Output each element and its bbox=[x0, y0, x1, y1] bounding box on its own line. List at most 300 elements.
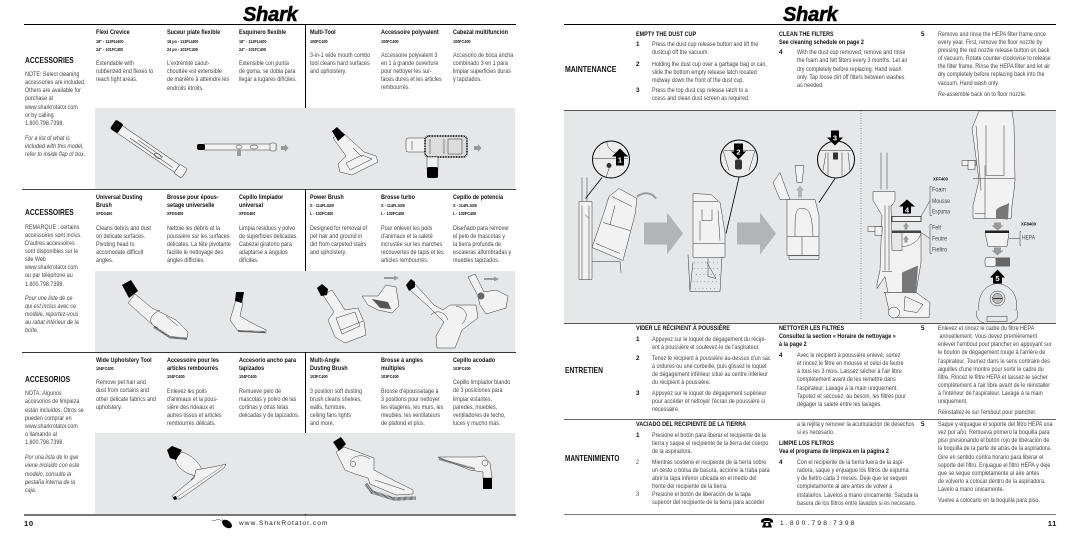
text: multi-tool: and upholstery. bbox=[310, 68, 346, 75]
note: lista de accesorios incluidos bbox=[24, 454, 80, 494]
text: remove and rinse HEPA filter: pressing the red nozzle release button on back bbox=[938, 47, 1049, 54]
text: accesorio ancho para tapizados: 104FC400 bbox=[239, 374, 257, 379]
text: accesorio ancho para tapizados: mascotas y polvo de las bbox=[239, 396, 296, 403]
icon: multi-angle brush large bbox=[333, 437, 416, 499]
text: clean the filters: CLEAN THE FILTERS bbox=[779, 31, 834, 38]
text: accessoire polyvalent: en 1 à grande ouverture bbox=[381, 60, 438, 67]
note: disponibilité des accessoires: accessoires sont inclus. bbox=[25, 232, 82, 239]
text: brosse pour époussetage: Nettoie les débris et la bbox=[167, 225, 220, 232]
text: universal dusting brush: XFDS400 bbox=[96, 211, 112, 216]
text: limpie los filtros: si es necesario. bbox=[797, 429, 834, 436]
text: rincez le cadre du filtre HEPA: le bouton de dégagement rouge à l'arrière de bbox=[938, 349, 1045, 356]
text: cepillo acodado: limpiar estantes, bbox=[453, 396, 492, 403]
text: esquinero flexible bbox=[239, 29, 297, 83]
text: multi-angle dusting brush bbox=[310, 357, 362, 427]
text: empty the dust cup: Holding the dust cup over a garbage bag or can, bbox=[652, 61, 767, 68]
text: rincez le cadre du filtre HEPA: uniquement. bbox=[938, 398, 968, 405]
text: accessoire polyvalent: Accessoire polyvalent bbox=[381, 29, 439, 36]
text: nettoyer les filtres: Consultez la section « Horaire de nettoyage » bbox=[779, 333, 896, 340]
text: saque el soporte del filtro HEPA: vez por año. Remueva primero la boquilla para bbox=[938, 429, 1050, 436]
text: universal dusting brush: Cleans debris and dust bbox=[96, 225, 151, 232]
note: liste des accessoires inclus: Pour une liste de ce bbox=[25, 294, 72, 302]
text: brosse à angles multiples: de plafond et plus. bbox=[381, 420, 425, 427]
text: cepillo acodado: Cepillo limpiador blando bbox=[453, 379, 510, 386]
text: cepillo limpiador universal: de superficies delicadas. bbox=[239, 233, 298, 240]
text: clean the filters bbox=[779, 31, 908, 89]
text: saque el soporte del filtro HEPA: de volverlo a colocar dentro de la aspiradora. bbox=[938, 478, 1045, 485]
note: accessories availability: 1.800.798.7398. bbox=[25, 120, 64, 127]
text: rincez le cadre du filtre HEPA bbox=[921, 325, 1049, 417]
step 3: access dust screen: 3 bbox=[833, 133, 837, 142]
text: suceur plate flexible: de manière à atteindre les bbox=[167, 76, 229, 83]
text: esquinero flexible: llegar a lugares difíciles. bbox=[239, 76, 297, 83]
heading: entretien: ENTRETIEN bbox=[565, 365, 603, 375]
text: nettoyer les filtres: et rincez le filtre en mousse et celui de feutre bbox=[797, 360, 904, 367]
illustration panel: upholstery and multi-angle tools bbox=[95, 433, 515, 514]
text: cepillo limpiador universal: universal bbox=[239, 202, 263, 209]
text: wide upholstery tool: 104FC400 bbox=[96, 366, 114, 371]
icon: telephone bbox=[761, 518, 773, 528]
illustration: foam and felt filters with vacuum: Fieltro bbox=[932, 247, 948, 253]
text: cepillo limpiador universal: adaptarse a ángulos bbox=[239, 249, 288, 256]
text: multi-angle dusting brush: brush cleans shelves, bbox=[310, 396, 362, 403]
text: multi-angle dusting brush: walls, furniture, bbox=[310, 404, 346, 411]
text: remove and rinse HEPA filter bbox=[921, 31, 1051, 98]
footer: page number 10: 10 bbox=[24, 519, 34, 528]
text: vaciado del recipiente: superior del recipiente de la tierra para acceder bbox=[652, 499, 765, 506]
text: accessoire polyvalent: pour nettoyer les sur- bbox=[381, 68, 432, 75]
text: brosse pour époussetage: XFDS400 bbox=[167, 211, 183, 216]
text: clean the filters: as needed. bbox=[797, 82, 824, 89]
note: accessories availability: or by calling bbox=[25, 112, 54, 119]
note: disponibilidad de accesorios: NOTA: Algunos bbox=[25, 390, 62, 397]
text: cepillo acodado: paredes, muebles, bbox=[453, 404, 497, 411]
text: limpie los filtros: completamente al aire antes de volver a bbox=[797, 483, 892, 490]
text: rincez le cadre du filtre HEPA: aiguilles d'une montre pour sortir le cadre du bbox=[938, 366, 1044, 373]
text: accessoire polyvalent: 100FC400 bbox=[381, 39, 399, 44]
text: cepillo acodado: de 3 posiciones para bbox=[453, 387, 503, 394]
illustration: HEPA filter with vacuum and nozzle: XF8400 bbox=[1021, 221, 1036, 226]
text: empty the dust cup: 1 bbox=[636, 41, 640, 48]
text: power brush: L - 102FC400 bbox=[310, 211, 333, 216]
note: accessories availability: purchase at bbox=[25, 95, 53, 102]
text: remove and rinse HEPA filter: vacuum. Hand wash only. bbox=[938, 80, 999, 87]
text: saque el soporte del filtro HEPA: soporte del filtro. Enjuague el filtro HEPA y deje bbox=[938, 462, 1050, 469]
text: saque el soporte del filtro HEPA: Gire en sentido contra horario para liberar el bbox=[938, 454, 1043, 461]
text: multi-angle dusting brush: Dusting Brush bbox=[310, 365, 348, 372]
text: rincez le cadre du filtre HEPA: Enlevez et rincez le cadre du filtre HEPA bbox=[938, 325, 1034, 332]
text: empty the dust cup: Press the top dust cup release latch to a bbox=[652, 87, 748, 94]
text: brosse à angles multiples: multiples bbox=[381, 365, 405, 372]
text: vider le récipient à poussière bbox=[636, 324, 771, 413]
heading: maintenance: MAINTENANCE bbox=[565, 64, 616, 74]
note: accessories availability: www.sharkrotator.com bbox=[25, 104, 78, 111]
note: lista de accesorios incluidos: modelo, consulte la bbox=[25, 470, 71, 478]
text: brosse pour époussetage: facilite le nettoyage des bbox=[167, 249, 223, 256]
step 2: empty dust cup: 2 bbox=[736, 147, 741, 156]
illustration: HEPA filter with vacuum and nozzle: HEPA bbox=[1022, 235, 1035, 241]
note: disponibilité des accessoires: D'autres accessoires bbox=[25, 240, 75, 247]
illustration: HEPA filter with vacuum and nozzle bbox=[962, 110, 1036, 322]
text: multi-angle dusting brush: 103FC400 bbox=[310, 374, 328, 379]
note: accessories availability: accessories are included. bbox=[25, 79, 86, 86]
text: multi-tool: 100FC400 bbox=[310, 39, 328, 44]
text: accesorio ancho para tapizados bbox=[239, 357, 299, 419]
text: empty the dust cup: Press the dust cup release button and lift the bbox=[652, 41, 758, 48]
text: remove and rinse HEPA filter: the filter frame. Rinse the HEPA filter and let air bbox=[938, 63, 1050, 70]
text: cepillo limpiador universal: XFDS400 bbox=[239, 211, 255, 216]
note: disponibilité des accessoires: sont disponibles sur le bbox=[25, 248, 78, 255]
text: wide upholstery tool: Remove pet hair and bbox=[96, 379, 146, 386]
text: esquinero flexible: 24" - 101FC400 bbox=[239, 47, 266, 52]
text: vider le récipient à poussière: pour accéder et nettoyer l'écran de poussière si bbox=[652, 398, 765, 405]
text: rincez le cadre du filtre HEPA: Réinstallez-le sur l'embout pour plancher. bbox=[938, 409, 1036, 416]
text: vider le récipient à poussière: VIDER LE RÉCIPIENT À POUSSIÈRE bbox=[636, 325, 730, 332]
text: nettoyer les filtres: à la page 2 bbox=[779, 341, 807, 348]
text: cepillo de potencia: muebles tapizados. bbox=[453, 257, 499, 264]
text: brosse pour époussetage: setage universelle bbox=[167, 202, 214, 209]
illustration panel: crevice and multi tools bbox=[95, 108, 515, 189]
text: vaciado del recipiente: 3 bbox=[636, 491, 639, 498]
text: brosse turbo: articles rembourrés. bbox=[381, 257, 428, 264]
illustration panel: maintenance steps bbox=[564, 111, 1056, 323]
note: lista de accesorios incluidos: Por una lista de lo que bbox=[25, 454, 78, 461]
text: flexi crevice: rubberized end flexes to bbox=[96, 68, 153, 75]
note: disponibilidad de accesorios: 1.800.798.7398. bbox=[25, 439, 64, 446]
text: remove and rinse HEPA filter: of vacuum. Rotate counter-clockwise to release bbox=[938, 55, 1051, 62]
text: clean the filters: With the dust cup removed, remove and rinse bbox=[797, 49, 905, 56]
text: vaciado del recipiente: tierra y saque el recipiente de la tierra del cuerpo bbox=[652, 440, 768, 447]
text: accessoire polyvalent: faces dures et les articles bbox=[381, 76, 442, 83]
text: empty the dust cup: 2 bbox=[636, 61, 640, 68]
text: cepillo limpiador universal bbox=[239, 194, 298, 264]
text: vaciado del recipiente bbox=[636, 421, 776, 511]
text: vaciado del recipiente: Presione el botón de liberación de la tapa bbox=[652, 491, 751, 498]
text: flexi crevice: Extendable with bbox=[96, 60, 134, 67]
text: power brush: Designed for removal of bbox=[310, 225, 367, 232]
text: cabezal multifunción: limpiar superficies duras bbox=[453, 68, 511, 75]
text: vider le récipient à poussière: du récipient à poussière. bbox=[652, 379, 710, 386]
text: power brush: pet hair and ground in bbox=[310, 233, 362, 240]
text: vaciado del recipiente: 2 bbox=[636, 459, 639, 466]
text: saque el soporte del filtro HEPA: Lávelo a mano únicamente. bbox=[938, 486, 1004, 493]
text: brosse turbo: d'animaux et la saleté bbox=[381, 233, 433, 240]
text: saque el soporte del filtro HEPA: Vuelve a colocarlo en la boquilla para piso. bbox=[938, 497, 1040, 504]
text: clean the filters: only. Tap loose dirt off filters between washes bbox=[797, 74, 904, 81]
text: cabezal multifunción: combinado 3 en 1 para bbox=[453, 60, 508, 67]
text: vider le récipient à poussière: de dégagement inférieur situé au centre inférieur bbox=[652, 371, 768, 378]
panel: maintenance English bbox=[565, 31, 1051, 102]
icon: multi-angle brush small bbox=[438, 456, 492, 489]
text: cepillo limpiador universal: difíciles. bbox=[239, 257, 258, 264]
panel: accessories Spanish bbox=[24, 357, 515, 514]
text: flexi crevice: 18" - 113FLI400 bbox=[96, 39, 123, 44]
text: accessoire rembourrés: autres tissus et articles bbox=[167, 412, 222, 419]
text: multi-tool bbox=[310, 29, 370, 75]
text: multi-angle dusting brush: Multi-Angle bbox=[310, 357, 340, 364]
text: rincez le cadre du filtre HEPA: filtre. Rincez le filtre HEPA et laissez-le sécher bbox=[938, 374, 1048, 381]
text: rincez le cadre du filtre HEPA: annuellement. Vous devez premièrement bbox=[939, 333, 1037, 340]
illustration: foam and felt filters with vacuum: Mousse bbox=[932, 198, 951, 204]
text: cepillo de potencia: Diseñado para remover bbox=[453, 225, 509, 232]
text: power brush: dirt from carpeted stairs bbox=[310, 241, 366, 248]
note: liste des accessoires inclus bbox=[25, 294, 79, 334]
text: accessoire rembourrés: d'animaux et la pous- bbox=[167, 396, 218, 403]
text: flexi crevice: Flexi Crevice bbox=[96, 29, 130, 36]
heading: accesorios: ACCESORIOS bbox=[25, 374, 70, 384]
note: disponibilité des accessoires bbox=[25, 224, 82, 288]
illustration: foam and felt filters with vacuum: Felt bbox=[932, 225, 941, 231]
text: brosse turbo: S - 114FLI400 bbox=[381, 203, 405, 208]
note: disponibilité des accessoires: ou par téléphone au bbox=[25, 272, 73, 279]
footer: page number 11: 11 bbox=[1048, 519, 1057, 528]
text: cepillo limpiador universal: Cabezal giratorio para bbox=[239, 241, 292, 248]
text: limpie los filtros: a la rejilla y remover la acumulación de desechos bbox=[797, 421, 914, 428]
text: universal dusting brush: Pivoting head to bbox=[96, 241, 135, 248]
note: disponibilité des accessoires: www.sharkrotator.com bbox=[25, 264, 78, 271]
step 1: remove dust cup: 1 bbox=[618, 155, 622, 164]
text: cepillo de potencia: el pelo de mascotas y bbox=[453, 233, 505, 240]
icon: dusting brush large bbox=[122, 280, 188, 339]
text: power brush: Power Brush bbox=[310, 194, 344, 201]
icon: multi-tool side view bbox=[332, 127, 378, 175]
text: brosse à angles multiples: les étagères, les murs, les bbox=[381, 404, 443, 411]
icon: multi-tool top view bbox=[406, 136, 482, 178]
note: accessories availability bbox=[25, 71, 86, 127]
text: accessoire rembourrés: articles rembourrés bbox=[167, 365, 218, 372]
note: disponibilidad de accesorios bbox=[25, 390, 84, 446]
text: wide upholstery tool: upholstery. bbox=[96, 404, 122, 411]
text: multi-tool: Multi-Tool bbox=[310, 29, 336, 36]
text: cepillo de potencia: la tierra profunda de bbox=[453, 241, 501, 248]
text: limpie los filtros: y de fieltro cada 3 meses. Deje que se sequen bbox=[797, 475, 907, 482]
text: cepillo limpiador universal: Limpia residuos y polvo bbox=[239, 225, 295, 232]
note: disponibilidad de accesorios: accesorios de limpieza bbox=[25, 398, 79, 405]
text: empty the dust cup: midway down the front of the dust cup. bbox=[652, 77, 744, 84]
icon: computer mouse bbox=[212, 518, 232, 528]
text: rincez le cadre du filtre HEPA: enlever l'embout pour plancher en appuyant sur bbox=[938, 341, 1052, 348]
text: cepillo acodado: 103FC400 bbox=[453, 366, 471, 371]
text: wide upholstery tool: other delicate fabrics and bbox=[96, 396, 156, 403]
logo: Shark left page: Shark bbox=[243, 4, 298, 26]
text: cepillo acodado: luces y mucho más. bbox=[453, 420, 500, 427]
text: accessoire polyvalent: rembourrés. bbox=[381, 84, 410, 91]
text: universal dusting brush: Brush bbox=[96, 202, 112, 209]
text: esquinero flexible: 18" - 113FLI400 bbox=[239, 39, 266, 44]
step 2: empty dust cup bbox=[688, 140, 758, 291]
text: empty the dust cup: dustcup off the vacuum. bbox=[652, 49, 709, 56]
text: brosse turbo: recouvertes de tapis et les bbox=[381, 249, 444, 256]
text: power brush bbox=[310, 194, 367, 256]
illustration: HEPA filter with vacuum and nozzle: 5 bbox=[995, 274, 1000, 282]
text: universal dusting brush: angles. bbox=[96, 257, 113, 264]
text: brosse à angles multiples: meubles, les ventilateurs bbox=[381, 412, 440, 419]
text: clean the filters: See cleaning schedule on page 2 bbox=[779, 39, 864, 46]
text: esquinero flexible: Esquinero flexible bbox=[239, 29, 286, 36]
text: brosse à angles multiples: Brosse à angles bbox=[381, 357, 423, 364]
text: empty the dust cup: slide the bottom empty release latch located bbox=[652, 69, 757, 76]
text: brosse turbo bbox=[381, 194, 444, 264]
text: suceur plate flexible: 24 po - 101FC400 bbox=[167, 47, 198, 52]
text: remove and rinse HEPA filter: dry completely before replacing back into the bbox=[938, 71, 1045, 78]
text: empty the dust cup: EMPTY THE DUST CUP bbox=[636, 31, 696, 38]
text: clean the filters: dry completely before replacing. Hand wash bbox=[797, 66, 901, 73]
text: accesorio ancho para tapizados: delicadas y de tapizados. bbox=[239, 412, 299, 419]
step 1: remove dust cup bbox=[579, 140, 656, 279]
panel: mantenimiento Spanish bbox=[564, 420, 1056, 513]
text: suceur plate flexible: Suceur plate flexible bbox=[167, 29, 220, 36]
text: vider le récipient à poussière: Tenez le récipient à poussière au-dessus d'un sac bbox=[652, 355, 771, 362]
text: nettoyer les filtres: dégager la saleté entre les lavages. bbox=[797, 401, 882, 408]
text: cepillo acodado bbox=[453, 357, 510, 427]
text: cepillo de potencia: Cepillo de potencia bbox=[453, 194, 503, 201]
text: multi-angle dusting brush: and more. bbox=[310, 420, 334, 427]
note: disponibilité des accessoires: 1.800.798.7398. bbox=[25, 281, 64, 288]
text: brosse à angles multiples: Brosse d'époussetage à bbox=[381, 388, 438, 395]
note: disponibilidad de accesorios: están incluidos. Otros se bbox=[25, 406, 84, 414]
text: suceur plate flexible: L'extrémité caout- bbox=[167, 60, 209, 67]
text: empty the dust cup: ccess and clean dust screen as required. bbox=[652, 95, 750, 102]
illustration panel: dusting and power brushes bbox=[95, 271, 515, 352]
text: limpie los filtros: 4 bbox=[779, 459, 783, 466]
text: vider le récipient à poussière: nécessaire. bbox=[652, 406, 679, 413]
text: clean the filters: 4 bbox=[779, 49, 783, 56]
text: suceur plate flexible: 18 po - 113FLI400 bbox=[167, 39, 198, 44]
note: liste des accessoires inclus: boîte. bbox=[25, 327, 38, 334]
text: esquinero flexible: Extensible con punta bbox=[239, 60, 289, 67]
text: multi-tool: tool cleans hard surfaces bbox=[310, 60, 370, 67]
icon: turbo brush large bbox=[406, 279, 478, 348]
text: flexi crevice: 24" - 101FC400 bbox=[96, 47, 123, 52]
step 3: access dust screen bbox=[773, 130, 854, 259]
note: list of included items: For a list of what is bbox=[25, 134, 70, 142]
icon: turbo brush small bbox=[468, 274, 508, 314]
text: limpie los filtros: Con el recipiente de la tierra fuera de la aspi- bbox=[797, 459, 904, 466]
text: saque el soporte del filtro HEPA bbox=[921, 421, 1049, 505]
panel: accessories French bbox=[25, 194, 515, 352]
note: accessories availability: Others are available for bbox=[25, 87, 81, 94]
text: empty the dust cup: 3 bbox=[636, 87, 640, 94]
illustration: foam and felt filters with vacuum: XFF400 bbox=[933, 176, 948, 181]
icon: short crevice tool bbox=[197, 143, 288, 156]
text: flexi crevice bbox=[96, 29, 153, 83]
text: nettoyer les filtres: complètement avant de les remettre dans bbox=[797, 376, 896, 383]
text: accessoire polyvalent: Accessoire polyvalent 3 bbox=[381, 52, 437, 59]
text: cepillo acodado: ventiladores de techo, bbox=[453, 412, 506, 419]
text: rincez le cadre du filtre HEPA: l'aspirateur. Tournez dans le sens contraire des bbox=[938, 358, 1050, 365]
text: vider le récipient à poussière: 3 bbox=[636, 390, 640, 397]
text: brosse turbo: Pour enlever les poils bbox=[381, 225, 432, 232]
note: disponibilité des accessoires: site Web bbox=[25, 256, 46, 263]
icon: power brush open underside bbox=[362, 276, 399, 313]
text: multi-tool: 3-in-1 wide mouth combo bbox=[310, 52, 370, 59]
text: brosse à angles multiples bbox=[381, 357, 444, 427]
text: clean the filters: the foam and felt filters every 3 months. Let air bbox=[797, 57, 907, 64]
text: nettoyer les filtres: NETTOYER LES FILTRES bbox=[779, 325, 844, 332]
text: limpie los filtros: radora, saque y enjuague los filtros de espuma bbox=[797, 467, 909, 474]
heading: accessories: ACCESSORIES bbox=[25, 55, 74, 65]
text: vider le récipient à poussière: Appuyez sur le loquet de dégagement du récipi- bbox=[652, 336, 766, 343]
text: accessoire rembourrés: sière des rideaux et bbox=[167, 404, 214, 411]
icon: long crevice tool bbox=[110, 119, 188, 178]
text: brosse pour époussetage bbox=[167, 194, 231, 264]
text: vider le récipient à poussière: Appuyez sur le loquet de dégagement supérieur bbox=[652, 390, 766, 397]
text: brosse turbo: Brosse turbo bbox=[381, 194, 415, 201]
text: brosse turbo: incrustée sur les marches bbox=[381, 241, 442, 248]
icon: wide upholstery tool bbox=[167, 446, 226, 500]
text: saque el soporte del filtro HEPA: que se seque completamente al aire antes bbox=[938, 470, 1039, 477]
text: nettoyer les filtres: Avec le récipient à poussière enlevé, sortez bbox=[797, 352, 900, 359]
text: cepillo acodado: Cepillo acodado bbox=[453, 357, 495, 364]
text: vaciado del recipiente: Presione el botón para liberar el recipiente de la bbox=[652, 432, 766, 439]
text: accessoire polyvalent bbox=[381, 29, 442, 91]
panel: accessories English bbox=[25, 29, 515, 189]
text: cabezal multifunción bbox=[453, 29, 514, 83]
text: accesorio ancho para tapizados: tapizados bbox=[239, 365, 264, 372]
note: disponibilidad de accesorios: o llamando al bbox=[25, 431, 57, 438]
text: vaciado del recipiente: de la aspiradora. bbox=[652, 448, 692, 455]
text: rincez le cadre du filtre HEPA: complètement à l'air libre avant de le réinstaller bbox=[938, 382, 1050, 389]
text: rincez le cadre du filtre HEPA: à l'intérieur de l'aspirateur. Lavage à la main bbox=[938, 390, 1043, 397]
heading: accessoires: ACCESSOIRES bbox=[25, 206, 74, 216]
text: multi-angle dusting brush: ceiling fans lights bbox=[310, 412, 351, 419]
illustration: foam and felt filters with vacuum: Espuma bbox=[932, 209, 951, 215]
text: wide upholstery tool: dust from curtains and bbox=[96, 387, 149, 394]
text: vaciado del recipiente: un cesto o bolsa de basura, accione la traba para bbox=[652, 467, 770, 474]
text: cabezal multifunción: y tapizados. bbox=[453, 76, 482, 83]
text: cabezal multifunción: Cabezal multifunción bbox=[453, 29, 508, 36]
text: accessoire rembourrés: rembourrés délicats. bbox=[167, 420, 216, 427]
text: vider le récipient à poussière: à ordures ou une corbeille, puis glissez le loquet bbox=[652, 363, 767, 370]
text: esquinero flexible: de goma, se dobla para bbox=[239, 68, 295, 75]
illustration: foam and felt filters with vacuum: Foam bbox=[932, 187, 946, 193]
text: vaciado del recipiente: 1 bbox=[636, 432, 640, 439]
text: vaciado del recipiente: frente del recipiente de la tierra. bbox=[652, 483, 727, 490]
text: accesorio ancho para tapizados: cortinas y otras telas bbox=[239, 404, 288, 411]
text: limpie los filtros: LIMPIE LOS FILTROS bbox=[779, 440, 834, 447]
text: remove and rinse HEPA filter: 5 bbox=[921, 31, 925, 38]
text: suceur plate flexible: chouttée est extensible bbox=[167, 68, 222, 75]
text: power brush: and upholstery. bbox=[310, 249, 346, 256]
text: accesorio ancho para tapizados: Remueve pelo de bbox=[239, 388, 281, 395]
text: saque el soporte del filtro HEPA: la boquilla de la parte de atrás de la aspiradora. bbox=[938, 445, 1051, 452]
note: disponibilité des accessoires: REMARQUE : certains bbox=[25, 224, 79, 230]
icon: power brush front bbox=[317, 284, 366, 343]
text: saque el soporte del filtro HEPA: 5 bbox=[921, 421, 925, 428]
note: accessories availability: NOTE: Select cleaning bbox=[25, 71, 79, 78]
illustration: foam and felt filters with vacuum bbox=[868, 152, 951, 318]
note: lista de accesorios incluidos: pestaña interna de la bbox=[25, 479, 75, 486]
text: power brush: S - 114FLI400 bbox=[310, 203, 334, 208]
text: suceur plate flexible bbox=[167, 29, 229, 92]
illustration: foam and felt filters with vacuum: 4 bbox=[905, 205, 910, 214]
text: flexi crevice: reach tight areas. bbox=[96, 76, 137, 83]
note: list of included items bbox=[25, 134, 85, 158]
text: brosse turbo: L - 102FC400 bbox=[381, 211, 404, 216]
text: empty the dust cup bbox=[636, 31, 767, 102]
text: brosse pour époussetage: poussière sur les surfaces bbox=[167, 233, 229, 240]
text: nettoyer les filtres: Tapotez et secouez, au besoin, les filtres pour bbox=[797, 393, 906, 400]
text: vaciado del recipiente: abrir la tapa inferior ubicada en el medio del bbox=[652, 475, 756, 482]
illustration: foam and felt filters with vacuum: Feutre bbox=[932, 236, 948, 242]
text: saque el soporte del filtro HEPA: Saque y enjuague el soporte del filtro HEPA una bbox=[938, 421, 1053, 428]
text: brosse pour époussetage: délicates. La tête pivotante bbox=[167, 241, 231, 248]
note: lista de accesorios incluidos: viene incluido con este bbox=[25, 462, 79, 469]
arrow: to step 3 bbox=[737, 212, 776, 254]
text: cepillo de potencia bbox=[453, 194, 512, 264]
note: disponibilidad de accesorios: pueden comprar en bbox=[25, 415, 72, 422]
note: lista de accesorios incluidos: caja. bbox=[25, 487, 36, 494]
